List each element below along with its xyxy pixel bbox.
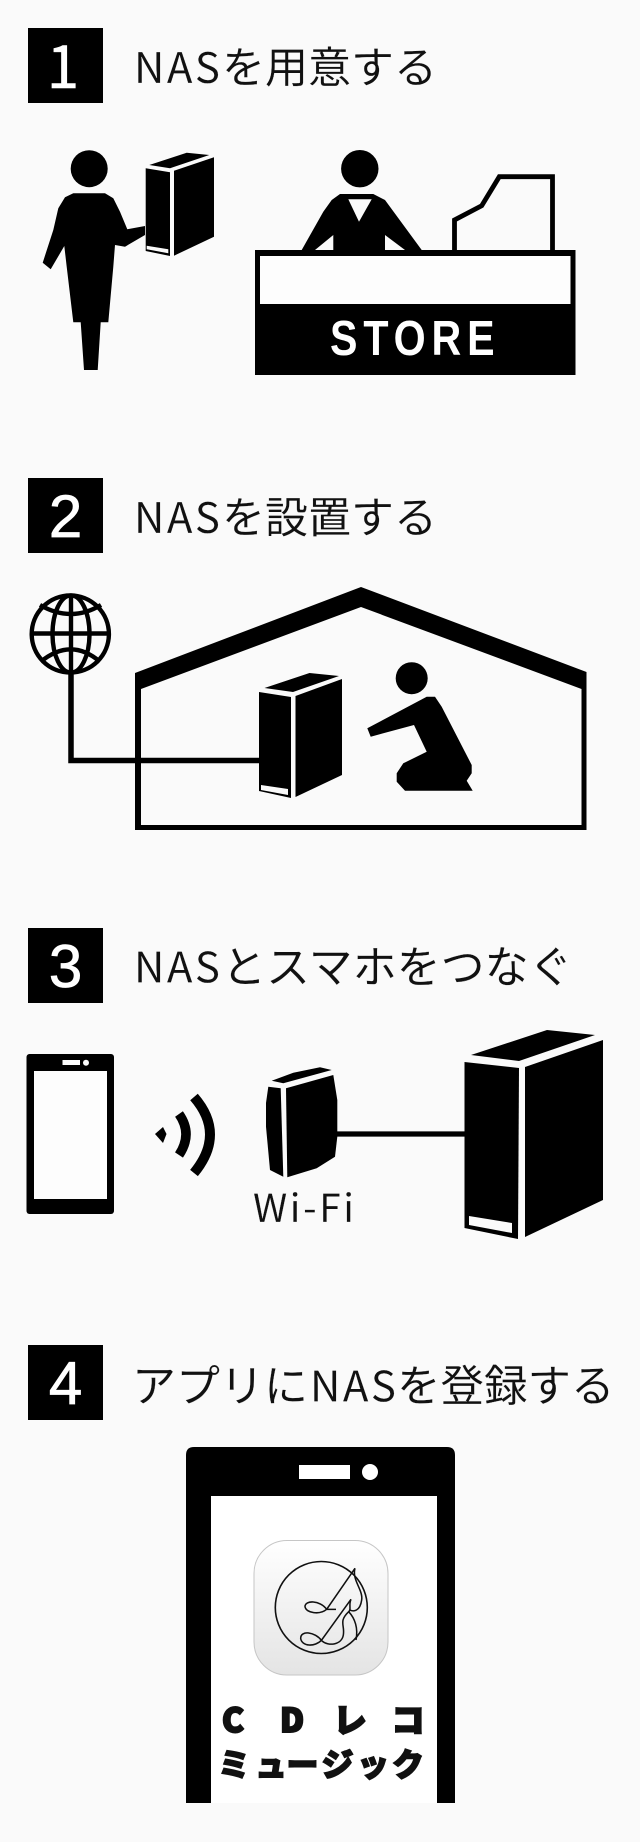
heading step 4: NAS — [310, 1354, 398, 1414]
heading step 1: を用意する — [222, 34, 437, 96]
heading step 3: とスマホをつなぐ — [222, 932, 573, 996]
step badge 4 — [28, 1345, 103, 1420]
panel: step 4 register NAS in app — [28, 1345, 614, 1803]
Wi-Fi label: Wi-Fi — [253, 1178, 354, 1234]
cable from router to NAS — [336, 1131, 465, 1137]
app name line 2: ミュージック — [218, 1740, 424, 1786]
heading step 1: NAS — [134, 35, 222, 96]
icon: customer holding NAS — [43, 150, 214, 370]
heading step 2: NAS — [134, 485, 222, 546]
step badge 1 — [28, 21, 103, 105]
icon: wireless waves — [155, 1097, 210, 1173]
panel: step 3 connect NAS and smartphone — [26, 928, 603, 1239]
panel: step 1 prepare NAS — [28, 21, 576, 375]
icon: smartphone — [26, 1054, 114, 1214]
heading step 3: NAS — [134, 934, 222, 996]
icon: large NAS — [464, 1030, 603, 1239]
heading step 4: アプリに — [132, 1350, 308, 1414]
store label: STORE — [330, 311, 500, 366]
icon: smartphone with app — [186, 1447, 455, 1803]
icon: NAS in house — [259, 673, 342, 798]
panel: step 2 install NAS — [28, 478, 586, 830]
step badge 1: 1 — [47, 21, 79, 105]
icon: house outline — [135, 587, 586, 830]
step badge 3: 3 — [49, 933, 82, 1000]
heading step 2: を設置する — [222, 484, 437, 546]
step badge 3 — [28, 928, 103, 1003]
cable from globe to NAS — [71, 673, 260, 760]
heading step 4: を登録する — [397, 1352, 614, 1414]
icon: store clerk at counter — [255, 150, 576, 375]
step badge 2: 2 — [49, 483, 82, 550]
app icon — [254, 1540, 388, 1675]
icon: Wi-Fi router — [266, 1067, 337, 1177]
step badge 4: 4 — [49, 1350, 82, 1417]
icon: kneeling person — [367, 662, 473, 791]
icon: globe — [32, 595, 109, 673]
app name line 1: CDレコ — [222, 1694, 424, 1742]
step badge 2 — [28, 478, 103, 553]
